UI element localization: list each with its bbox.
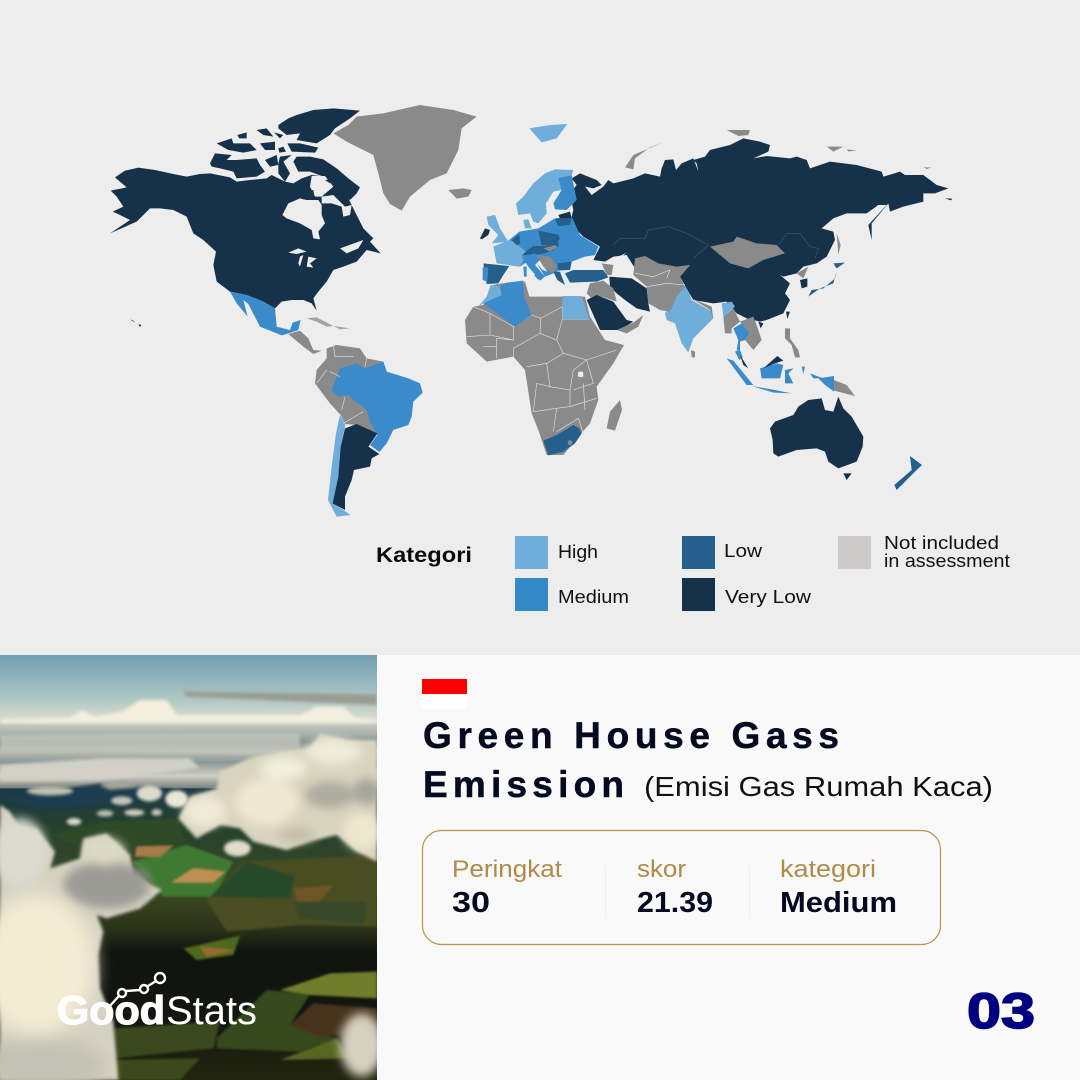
region: Lake Victoria (578, 372, 583, 377)
stat: Peringkat: 30 (452, 887, 490, 919)
region: Iceland (448, 188, 472, 199)
Africa borders (467, 307, 617, 433)
map: South and Southeast Asia (691, 298, 855, 396)
region: Malaysia Borneo (763, 356, 783, 368)
region: North America dark (110, 108, 381, 311)
region: Peninsular Malaysia (735, 350, 743, 360)
stat: Peringkat: Peringkat (452, 856, 562, 883)
region: Saudi Arabia (587, 295, 633, 330)
title line 1: Green House Gass (423, 715, 839, 756)
region: Russia, Kazakhstan and China (570, 138, 948, 322)
info panel background (377, 655, 1080, 1080)
title (423, 715, 993, 805)
region: Myanmar (723, 308, 740, 333)
legend (376, 533, 1010, 611)
legend item: Not included in assessment: in assessment (884, 551, 1010, 571)
region: India (665, 285, 713, 352)
region: Caucasus (602, 263, 613, 275)
region: Norway and Sweden (516, 169, 573, 223)
region: Spain (483, 263, 509, 284)
region: Iran (609, 277, 650, 312)
map panel background (0, 0, 1080, 655)
region: South America gray (315, 345, 387, 457)
stat: skor (637, 856, 713, 919)
stat: kategori: Medium (780, 887, 897, 919)
region: Belarus (555, 225, 580, 240)
legend item: Very Low (682, 578, 812, 611)
region: Hungary (543, 245, 557, 252)
region: Caribbean (307, 317, 350, 329)
region: Central America (288, 331, 322, 354)
region: Turkey (565, 270, 608, 283)
legend item: Low (682, 536, 763, 569)
region: Philippines (785, 328, 800, 357)
legend item: High: High (558, 542, 598, 562)
region: Tasmania (843, 473, 852, 480)
region: Arctic islands (727, 130, 932, 169)
page number: 03 (967, 983, 1035, 1039)
world map (110, 105, 952, 517)
region: Middle East (587, 281, 617, 302)
region: Northeast India (722, 302, 735, 317)
region: Caspian Sea (615, 253, 630, 281)
legend item: Low: Low (724, 541, 763, 561)
region: Morocco (478, 285, 502, 307)
region: Greece (553, 272, 565, 285)
left cloud mass (0, 805, 162, 1080)
region: Hawaii (130, 319, 141, 327)
region: Finland (553, 175, 577, 210)
region: Brazil (332, 362, 423, 452)
legend title: Kategori (376, 543, 472, 567)
region: Madagascar (607, 400, 622, 431)
region: Portugal (483, 267, 488, 282)
region: Balkans (537, 255, 557, 273)
flag: Indonesia (422, 679, 467, 709)
legend item: Not included in assessment: Not included (884, 533, 999, 553)
region: Czechia and Austria (522, 246, 558, 256)
region: Sri Lanka (691, 350, 695, 357)
region: Japan (808, 263, 845, 297)
region: Sakhalin (837, 233, 841, 255)
farmland fields (50, 818, 377, 1080)
region: Romania (553, 248, 572, 263)
legend item: Very Low: Very Low (725, 587, 812, 607)
region: Latvia and Lithuania (555, 218, 572, 227)
region: Adriatic Sea (533, 259, 547, 272)
region: Svalbard (529, 124, 567, 142)
map: Europe and North Africa (478, 169, 608, 327)
region: Chukotka tip (945, 198, 952, 200)
legend item: High (515, 536, 598, 569)
photo: clouds over farmland (0, 655, 383, 1080)
region: Hudson Bay and water overlays (282, 176, 363, 268)
stat: Peringkat (452, 856, 562, 919)
region: Indochina (740, 317, 762, 350)
legend item: Not included in assessment (838, 533, 1010, 571)
region: Ireland (480, 228, 490, 239)
small clouds (27, 785, 251, 856)
region: Argentina (333, 424, 379, 510)
logo network icon (108, 973, 165, 1008)
region: Benelux (512, 233, 522, 245)
region: Australia (770, 397, 863, 468)
region: Germany (519, 230, 540, 252)
region: Bangladesh and Nepal (692, 298, 713, 318)
region: Arctic channel islands on water (302, 179, 332, 200)
map: Americas and Greenland (110, 105, 477, 517)
region: Ukraine (558, 238, 598, 257)
South America borders (317, 345, 367, 423)
map: Africa, Oceania (465, 124, 922, 490)
stat: skor: skor (637, 856, 686, 883)
map: Russia, Central Asia and East Asia (570, 130, 952, 333)
region: Oman and Yemen (617, 315, 643, 333)
region: continental Europe base (493, 217, 598, 277)
region: Denmark (523, 219, 532, 228)
region: Mexico (230, 292, 301, 335)
logo: GoodStats (57, 973, 257, 1033)
region: Algeria (483, 281, 532, 327)
logo wordmark Stats: Stats (166, 989, 257, 1033)
bottom right cloud (340, 1013, 383, 1077)
region: Indonesia (727, 358, 834, 393)
legend item: Medium (515, 578, 629, 611)
region: Taiwan and Hainan (758, 312, 790, 328)
title line 2: Emission (423, 764, 624, 805)
region: South Korea (800, 278, 807, 288)
region: Lesotho (568, 440, 572, 445)
legend item: Medium: Medium (558, 587, 629, 607)
region: Estonia (558, 212, 572, 218)
region: Italy (522, 253, 545, 281)
region: Greenland (333, 105, 477, 211)
region: North Korea (797, 267, 808, 278)
region: Thailand (733, 323, 750, 352)
subtitle: (Emisi Gas Rumah Kaca) (644, 771, 993, 802)
region: Bulgaria (557, 262, 572, 270)
region: Africa gray (465, 282, 624, 455)
region: Poland (538, 231, 560, 247)
region: Novaya Zemlya (625, 142, 665, 169)
stats card (422, 830, 940, 944)
region: Egypt (562, 296, 589, 319)
region: UK (487, 215, 508, 243)
logo wordmark Good: Good (57, 989, 165, 1033)
region: South Africa (543, 425, 582, 455)
right cloud mass (178, 733, 377, 862)
region: Central Asia (633, 256, 690, 312)
region: New Zealand (894, 456, 922, 490)
region: France (493, 240, 527, 267)
stat: skor: 21.39 (637, 887, 713, 919)
stat: kategori (780, 856, 897, 919)
inner borders (613, 227, 818, 258)
stat: kategori: kategori (780, 856, 876, 883)
region: Mongolia (710, 237, 785, 268)
region: Papua New Guinea (834, 380, 855, 396)
region: Chile (328, 415, 351, 517)
